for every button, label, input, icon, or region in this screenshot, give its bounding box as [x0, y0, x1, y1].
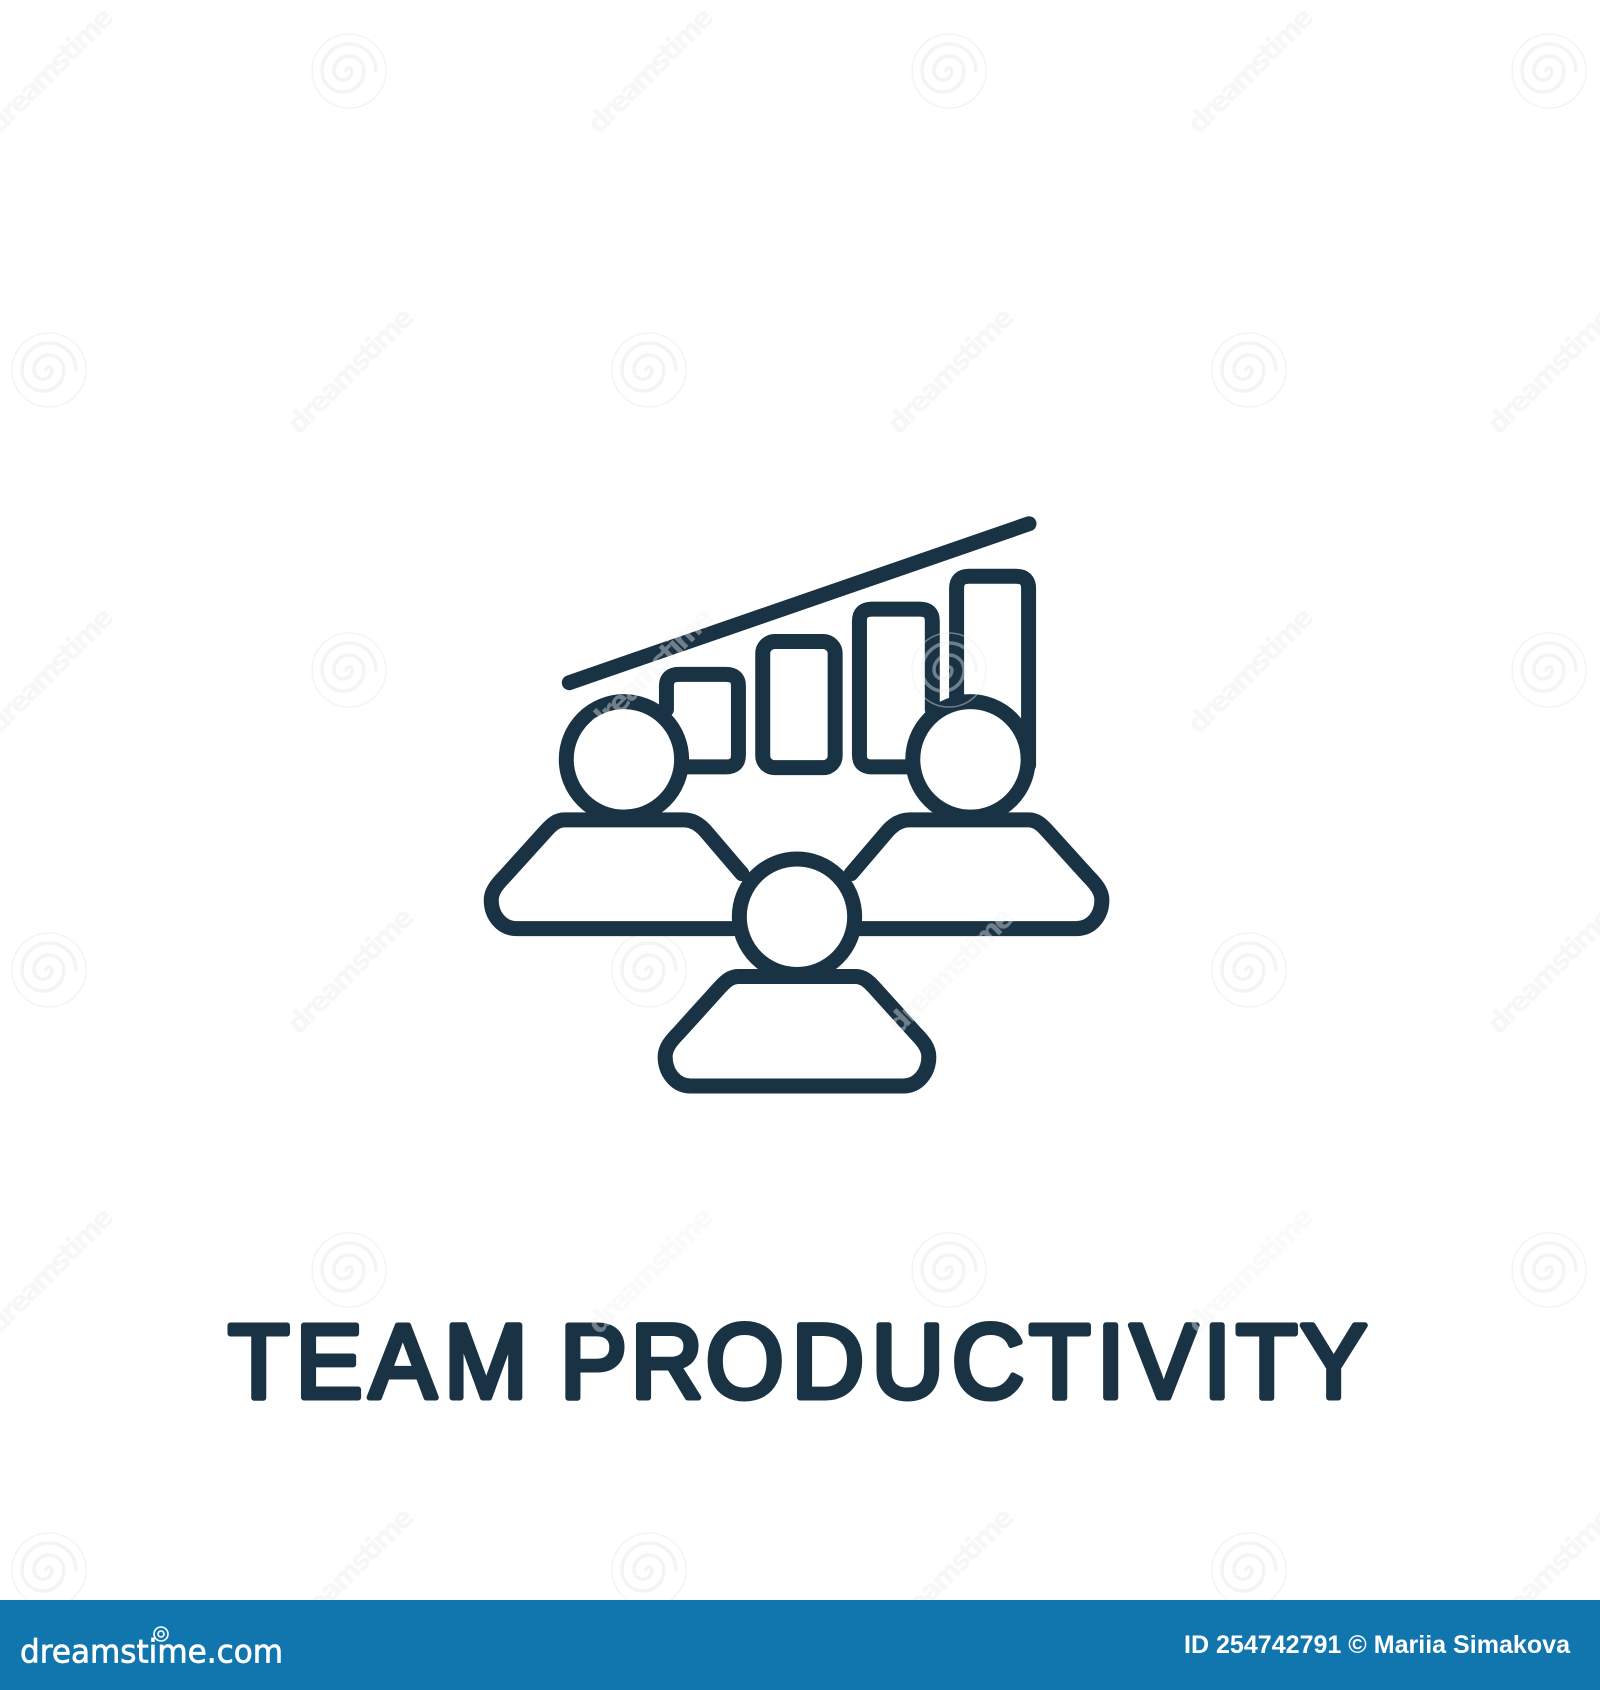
icon: bar 4 [957, 576, 1029, 765]
icon: logo spiral [154, 1627, 168, 1641]
watermark layer: faint dreamstime spirals and diagonal text: dreamstime [1180, 1200, 1320, 1340]
icon: center person body [665, 976, 929, 1086]
watermark layer: faint dreamstime spirals and diagonal text: dreamstime [580, 600, 720, 740]
watermark layer: faint dreamstime spirals and diagonal text: dreamstime [280, 900, 420, 1040]
watermark layer: faint dreamstime spirals and diagonal text: dreamstime [280, 1500, 420, 1640]
watermark layer: faint dreamstime spirals and diagonal text: dreamstime [1180, 0, 1320, 140]
icon: center person head [739, 859, 855, 974]
watermark layer: faint dreamstime spirals and diagonal text: dreamstime [1180, 600, 1320, 740]
watermark overlay on the icon and title [580, 600, 1320, 1340]
watermark overlay on the icon and title: dreamstime [580, 1200, 720, 1340]
title: TEAM PRODUCTIVITY [228, 1303, 1367, 1420]
icon: bar 3 [859, 609, 932, 767]
watermark layer: faint dreamstime spirals and diagonal text: dreamstime [580, 1200, 720, 1340]
footer credit: ID 254742791 © Mariia Simakova [1184, 1631, 1571, 1659]
watermark overlay on the icon and title: dreamstime [1180, 1200, 1320, 1340]
watermark layer: faint dreamstime spirals and diagonal text: dreamstime [580, 0, 720, 140]
icon: right person body [851, 820, 1102, 929]
icon: team productivity [491, 524, 1102, 1086]
watermark overlay on the icon and title: dreamstime [580, 600, 720, 740]
icon: trend line [569, 524, 1029, 683]
watermark overlay on the icon and title: dreamstime [880, 900, 1020, 1040]
icon: bar 1 [666, 674, 738, 767]
footer band [0, 1600, 1600, 1690]
footer logo: dreamstime.com: dreamstime.com [20, 1632, 283, 1670]
icon: bar 2 [763, 642, 835, 768]
watermark layer: faint dreamstime spirals and diagonal text: dreamstime [880, 1500, 1020, 1640]
icon: left person body [491, 820, 742, 929]
icon: left person head [566, 702, 682, 817]
watermark layer: faint dreamstime spirals and diagonal text: dreamstime [880, 900, 1020, 1040]
icon: right person head [913, 702, 1028, 817]
watermark layer: faint dreamstime spirals and diagonal text: dreamstime [880, 300, 1020, 440]
watermark layer: faint dreamstime spirals and diagonal text: dreamstime [280, 300, 420, 440]
